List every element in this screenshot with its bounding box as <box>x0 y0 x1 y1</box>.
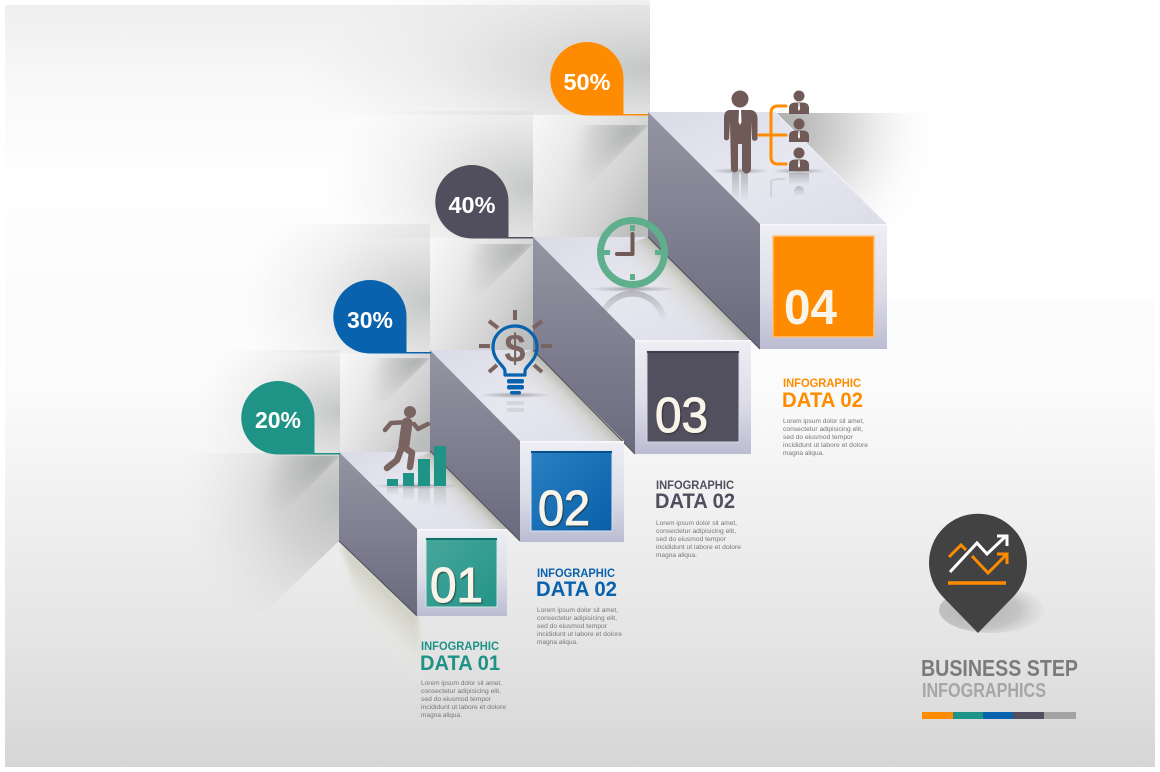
text block: step 3 <box>655 478 741 559</box>
text block: step 2: INFOGRAPHIC <box>537 566 615 580</box>
backdrop: folded stair walls <box>185 0 985 690</box>
pin: 50% <box>550 42 648 116</box>
icon: runner on bars <box>372 406 460 509</box>
text block: step 3: consectetur adipisicing elit, <box>656 528 736 535</box>
pin: 50%: 50% <box>564 69 610 95</box>
icon: manager and team hierarchy <box>710 90 826 201</box>
step 1 box: 01 <box>430 559 483 613</box>
pin: 40%: 40% <box>448 192 496 218</box>
step 4 box <box>648 112 887 349</box>
text block: step 4: incididunt ut labore et dolore <box>783 442 868 449</box>
text block: step 1: consectetur adipisicing elit, <box>421 688 501 695</box>
text block: step 4: DATA 02 <box>782 389 863 412</box>
text block: step 4: Lorem ipsum dolor sit amet, <box>783 418 864 425</box>
step 2 box <box>430 350 635 542</box>
step 2 box: 02 <box>538 482 590 536</box>
text block: step 2: DATA 02 <box>536 578 617 601</box>
text block: step 4: consectetur adipisicing elit, <box>783 426 863 433</box>
icon: light bulb with dollar <box>479 310 552 412</box>
colour legend bar <box>922 712 1076 719</box>
text block: step 3: incididunt ut labore et dolore <box>656 544 741 551</box>
text block: step 2: consectetur adipisicing elit, <box>537 615 617 622</box>
title: INFOGRAPHICS <box>922 680 1046 702</box>
text block: step 2: incididunt ut labore et dolore <box>537 631 622 638</box>
text block: step 3: DATA 02 <box>655 490 735 513</box>
text block: step 3: sed do eiusmod tempor <box>656 536 727 543</box>
icon: map pin with growth chart <box>929 514 1045 633</box>
pin: 30% <box>333 280 431 354</box>
text block: step 2: Lorem ipsum dolor sit amet, <box>537 607 618 614</box>
step 3 box: 03 <box>655 389 708 443</box>
text block: step 1: DATA 01 <box>420 652 500 675</box>
text block: step 4: sed do eiusmod tempor <box>783 434 854 441</box>
text block: step 2: sed do eiusmod tempor <box>537 623 608 630</box>
text block: step 1: incididunt ut labore et dolore <box>421 704 506 711</box>
text block: step 4 <box>782 376 868 457</box>
text block: step 2 <box>536 566 622 646</box>
text block: step 3: Lorem ipsum dolor sit amet, <box>656 520 737 527</box>
text block: step 1: Lorem ipsum dolor sit amet, <box>421 680 502 687</box>
text block: step 1: INFOGRAPHIC <box>421 639 499 653</box>
text block: step 2: magna aliqua. <box>537 639 578 646</box>
text block: step 1: magna aliqua. <box>421 712 462 719</box>
text block: step 1: sed do eiusmod tempor <box>421 696 492 703</box>
pin: 30%: 30% <box>347 307 393 333</box>
pin: 20% <box>241 381 340 454</box>
pin: 20%: 20% <box>255 407 301 433</box>
icon: light bulb with dollar: $ <box>504 327 526 371</box>
step 3 box <box>533 237 760 454</box>
text block: step 3: INFOGRAPHIC <box>656 478 734 492</box>
pin: 40% <box>435 165 533 238</box>
title: BUSINESS STEP <box>921 655 1078 681</box>
text block: step 4: INFOGRAPHIC <box>783 376 861 390</box>
step 4 box: 04 <box>784 281 837 335</box>
text block: step 3: magna aliqua. <box>656 552 697 559</box>
title <box>921 655 1078 702</box>
text block: step 1 <box>420 639 506 719</box>
icon: clock <box>588 220 676 320</box>
text block: step 4: magna aliqua. <box>783 450 824 457</box>
step 1 box <box>339 451 520 616</box>
